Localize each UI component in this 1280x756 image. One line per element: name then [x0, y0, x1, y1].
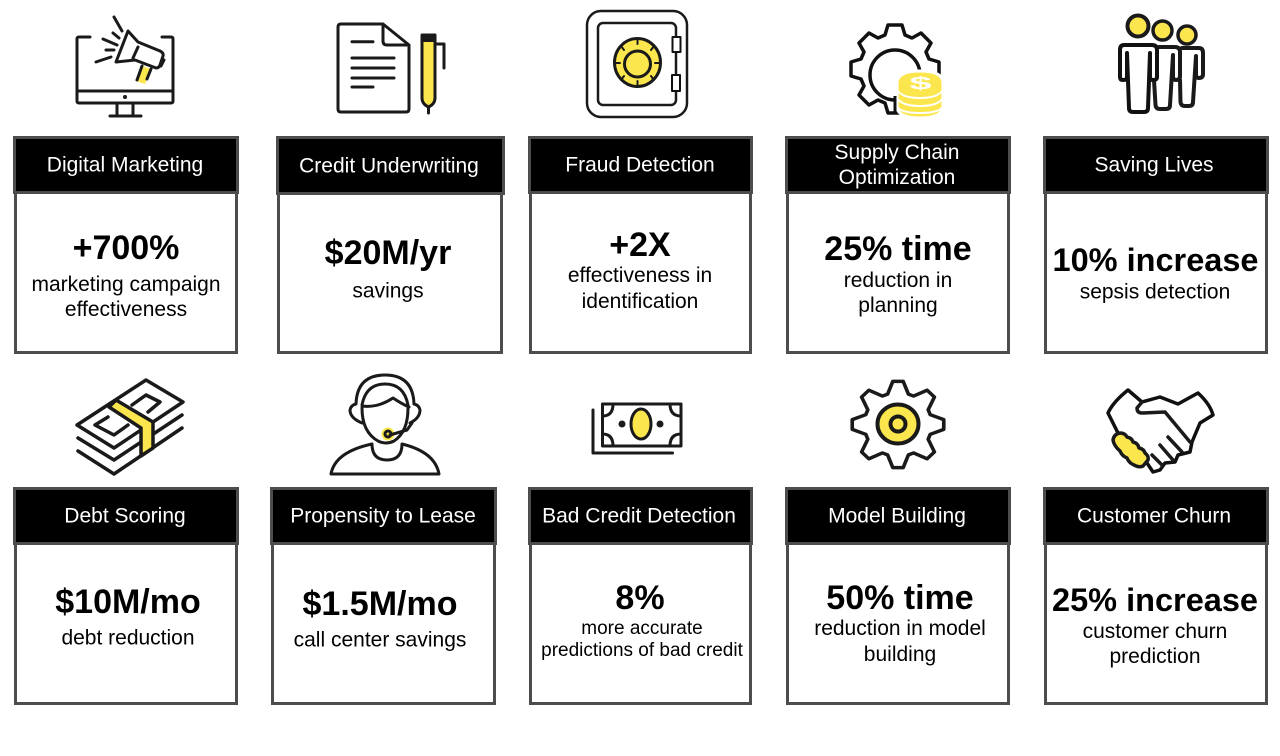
panel: digital marketing: [13, 136, 239, 354]
description: customer churn: [1083, 620, 1227, 643]
description: effectiveness in: [568, 264, 712, 287]
icon: gear with yellow centre: [850, 380, 946, 470]
description: [31, 273, 221, 321]
body box: [529, 191, 752, 354]
description: building: [864, 643, 936, 666]
description: prediction: [1109, 645, 1201, 668]
heading: Debt Scoring: [64, 504, 186, 528]
metric: $10M/mo: [55, 583, 201, 621]
description: sepsis detection: [1080, 280, 1230, 304]
heading: Model Building: [828, 504, 966, 528]
metric: +700%: [73, 229, 179, 267]
heading: Digital Marketing: [47, 154, 203, 176]
icon: stack of money: [75, 378, 185, 476]
body box: [271, 542, 496, 705]
metric: 25% time: [824, 230, 972, 268]
metric: 8%: [615, 579, 665, 617]
heading: Optimization: [839, 166, 955, 189]
description: [568, 264, 712, 313]
body box: [14, 191, 238, 354]
panel: model building: [785, 487, 1011, 705]
body box: [1044, 542, 1268, 705]
description: predictions of bad credit: [541, 640, 743, 661]
icon: call center agent with headset: [330, 374, 440, 476]
header bar: [13, 487, 239, 545]
description: reduction in: [844, 269, 952, 292]
metric: 10% increase: [1053, 242, 1258, 278]
panel: propensity to lease: [270, 487, 497, 705]
panel: customer churn: [1043, 487, 1269, 705]
metric: $20M/yr: [325, 234, 451, 272]
heading: Saving Lives: [1094, 154, 1214, 176]
icon: three people: [1118, 14, 1205, 114]
header bar: [276, 136, 505, 195]
header bar: [1043, 487, 1269, 545]
header bar: [270, 487, 497, 545]
description: marketing campaign: [31, 273, 221, 296]
description: [1083, 620, 1227, 668]
panel: fraud detection: [528, 136, 753, 354]
description: [814, 617, 986, 666]
header bar: [528, 136, 753, 194]
heading: Propensity to Lease: [290, 504, 476, 528]
heading: Bad Credit Detection: [542, 504, 736, 528]
description: more accurate: [581, 618, 703, 639]
header bar: [785, 487, 1011, 545]
header bar: [13, 136, 239, 194]
metric: $1.5M/mo: [303, 585, 457, 623]
heading: Fraud Detection: [565, 154, 715, 176]
description: planning: [858, 294, 938, 317]
body box: [786, 191, 1010, 354]
panel: debt scoring: [13, 487, 239, 705]
description: identification: [582, 290, 698, 313]
body box: [529, 542, 752, 705]
body box: [786, 542, 1010, 705]
icon: document and pen: [336, 22, 446, 114]
description: debt reduction: [61, 626, 195, 650]
panel: saving lives: [1043, 136, 1269, 354]
icon: monitor with megaphone: [76, 15, 174, 118]
icon: banknote: [592, 402, 682, 454]
description: [844, 269, 952, 317]
metric: 25% increase: [1052, 582, 1258, 618]
icon: safe with yellow dial: [586, 10, 688, 118]
description: savings: [352, 280, 424, 302]
metric: +2X: [609, 226, 671, 264]
icon: handshake: [1106, 388, 1215, 474]
icon: gear with coins: $: [909, 73, 932, 93]
heading: Supply Chain: [835, 141, 959, 164]
icon: gear with coins: [849, 23, 942, 116]
header bar: [1043, 136, 1269, 194]
panel: supply chain optimization: [785, 136, 1011, 354]
body box: [1044, 191, 1268, 354]
header bar: [785, 136, 1011, 194]
body box: [277, 191, 503, 354]
description: reduction in model: [814, 617, 986, 640]
heading: [835, 141, 959, 189]
panel: credit underwriting: [276, 136, 505, 354]
body box: [14, 542, 238, 705]
heading: Customer Churn: [1077, 504, 1231, 528]
description: effectiveness: [65, 298, 187, 321]
metric: 50% time: [826, 579, 974, 617]
description: call center savings: [294, 628, 466, 652]
panel: bad credit detection: [528, 487, 753, 705]
heading: Credit Underwriting: [299, 154, 479, 178]
description: [541, 618, 743, 661]
header bar: [528, 487, 753, 545]
